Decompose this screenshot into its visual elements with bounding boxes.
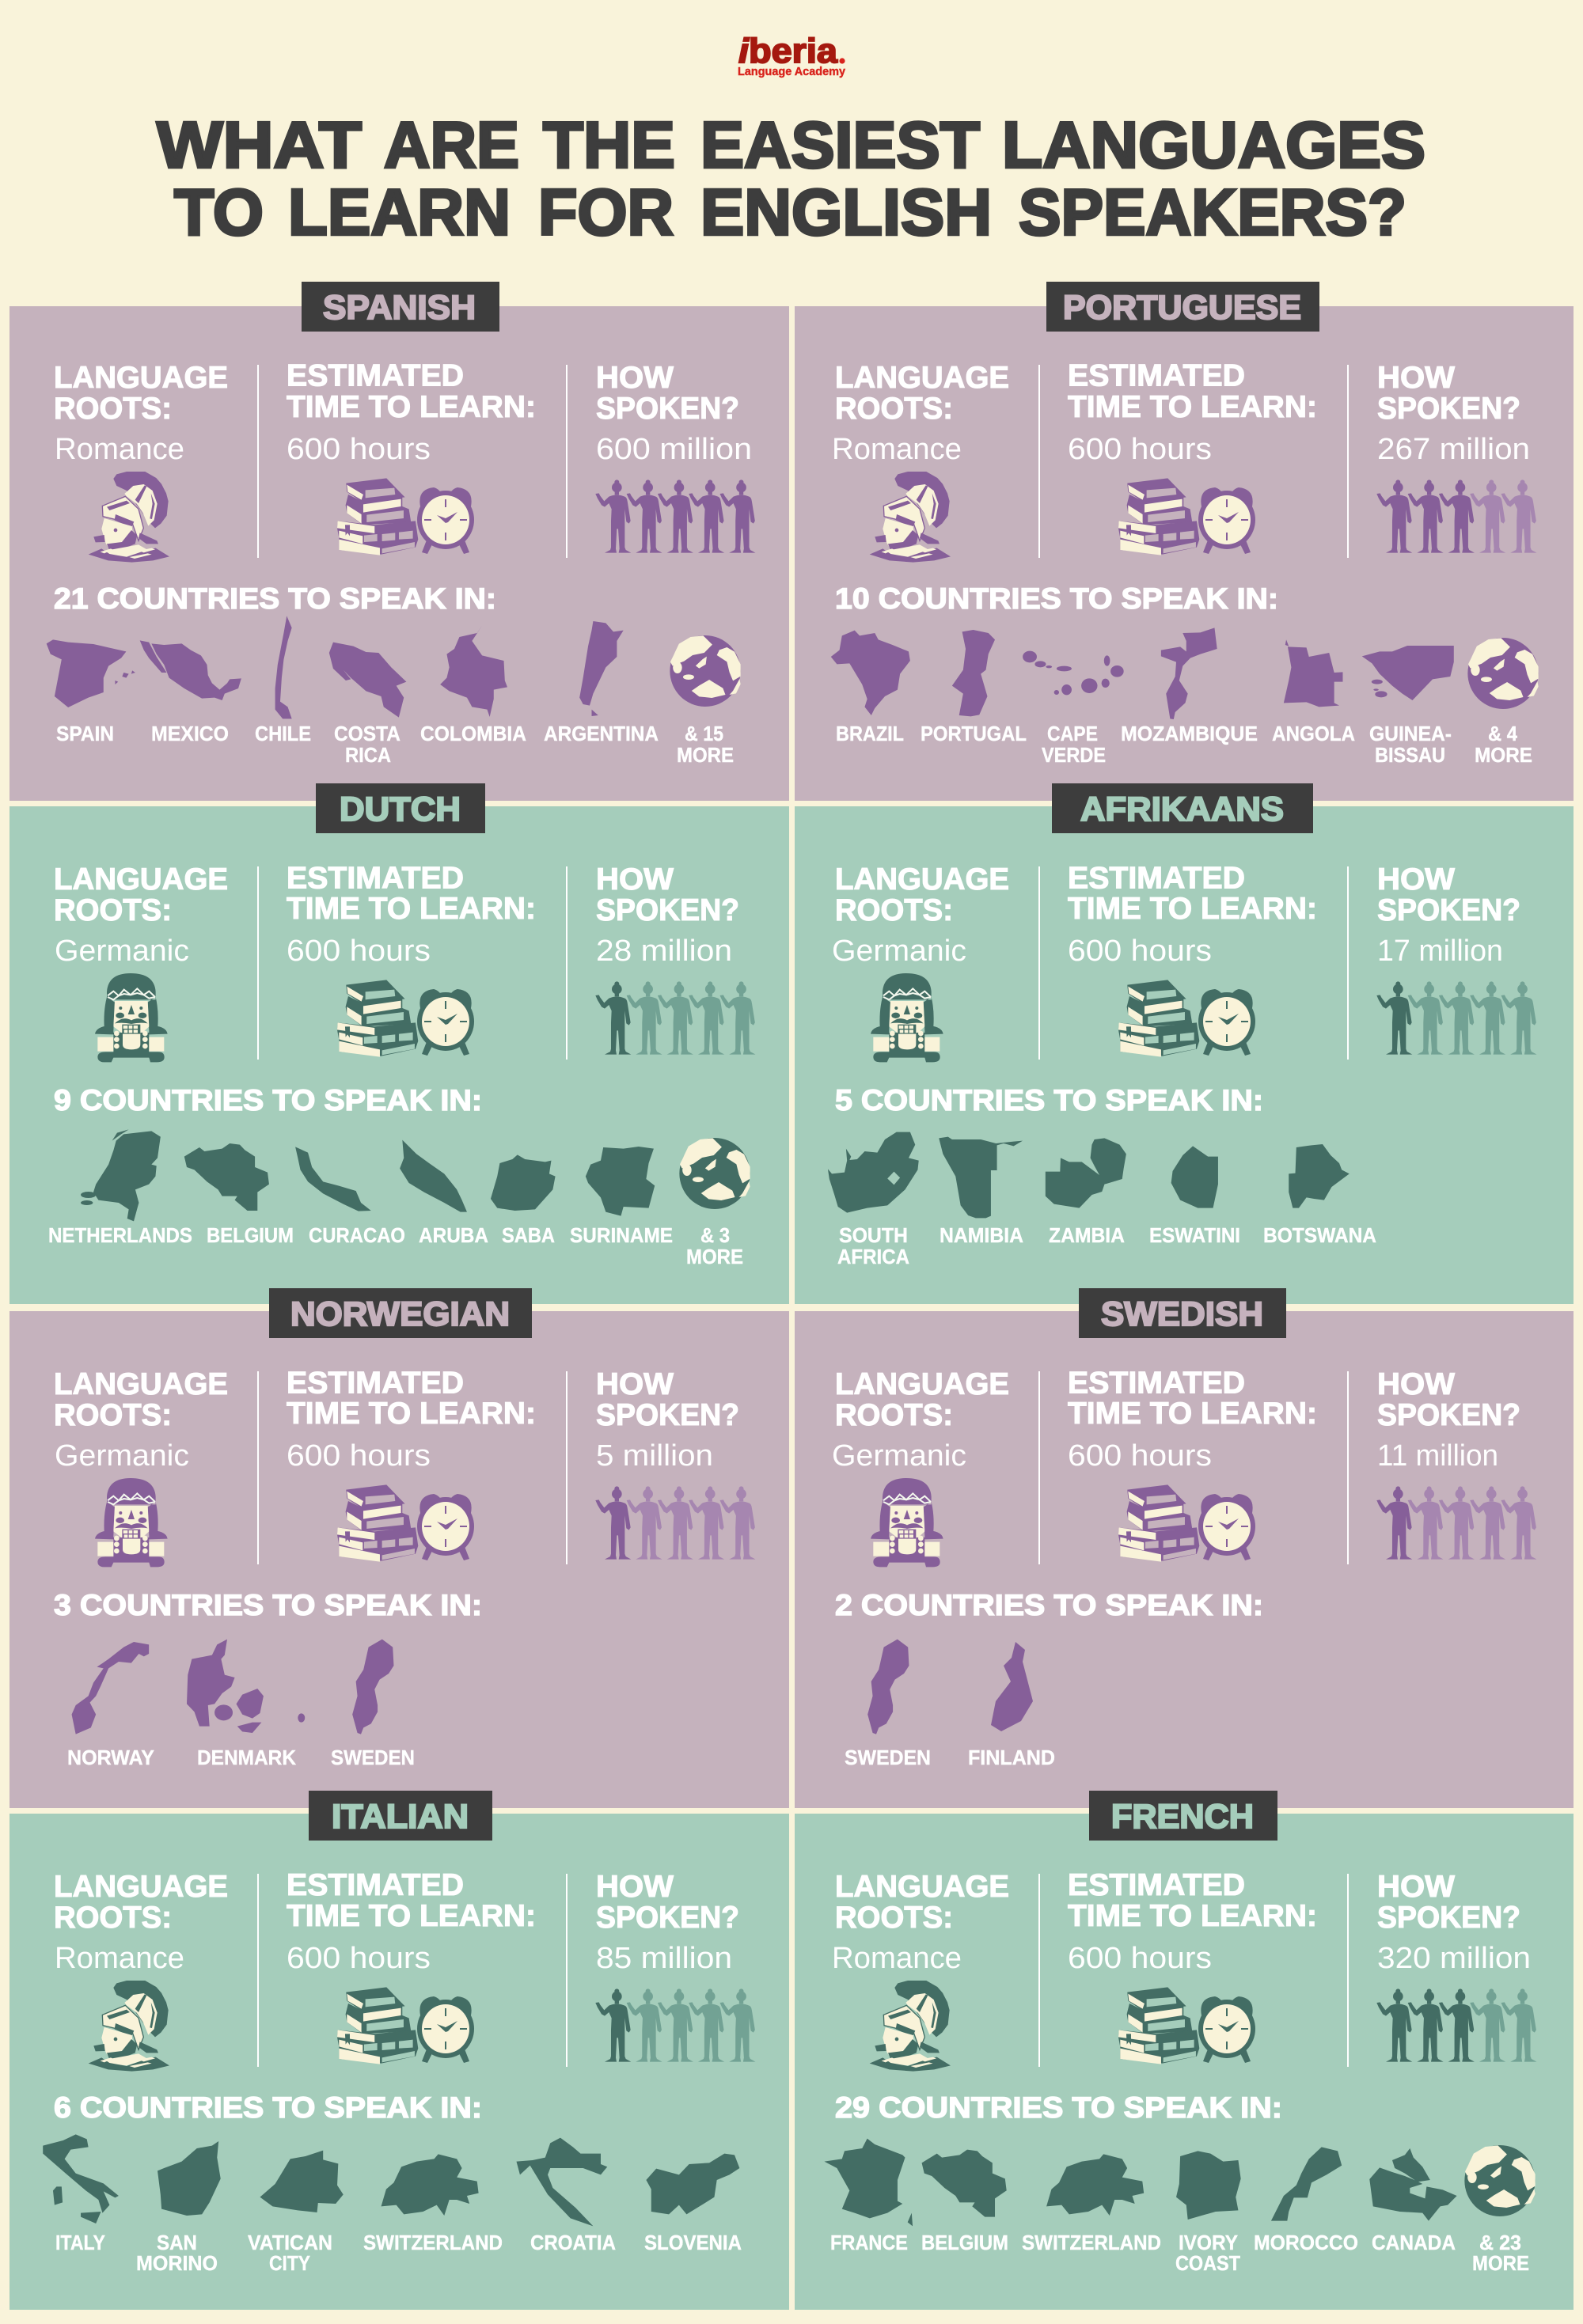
labels: Dutch countries: & 3: [700, 1223, 730, 1247]
stats row: Norwegian: 600 hours: [287, 1439, 431, 1473]
title: LANGUAGES: [1002, 108, 1425, 182]
stats row: Italian: 85 million: [596, 1942, 732, 1975]
labels: Swedish countries: [845, 1746, 1055, 1769]
panel: Dutch: [9, 783, 789, 1304]
labels: Portuguese countries: & 4: [1488, 722, 1517, 745]
labels: Dutch countries: SURINAME: [570, 1223, 673, 1247]
stats row: Spanish: Romance: [55, 433, 184, 466]
stats row: Swedish: ESTIMATED: [1068, 1366, 1245, 1401]
labels: Swedish countries: FINLAND: [968, 1746, 1055, 1769]
stats row: Spanish: ROOTS:: [54, 392, 172, 426]
stats row: French: Romance: [832, 1942, 962, 1975]
stats row: Italian: TIME TO LEARN:: [287, 1899, 536, 1933]
heading: countries: 2 COUNTRIES TO SPEAK IN:: [835, 1588, 1263, 1621]
stats row: Dutch: SPOKEN?: [596, 893, 739, 927]
labels: Dutch countries: ARUBA: [419, 1223, 488, 1247]
tab: Italian: ITALIAN: [332, 1798, 469, 1836]
heading: countries: 9 COUNTRIES TO SPEAK IN:: [54, 1083, 482, 1117]
stats row: Spanish: 600 hours: [287, 433, 431, 466]
labels: Norwegian countries: DENMARK: [197, 1746, 296, 1769]
stats row: Dutch: LANGUAGE: [54, 862, 228, 897]
icon: globe: [670, 635, 741, 707]
stats row: Spanish: 600 million: [596, 433, 752, 466]
stats row: Norwegian: HOW: [596, 1367, 674, 1401]
stats row: Afrikaans: 600 hours: [1068, 935, 1212, 968]
stats row: French: LANGUAGE: [835, 1870, 1009, 1904]
labels: Norwegian countries: [67, 1746, 415, 1769]
panel: French: [795, 1791, 1574, 2310]
labels: French countries: MORE: [1472, 2251, 1529, 2275]
stats row: Norwegian: TIME TO LEARN:: [287, 1397, 536, 1431]
logo: Iberia Language Academy: iberia: [738, 32, 838, 70]
labels: Norwegian countries: NORWAY: [67, 1746, 154, 1769]
labels: French countries: CANADA: [1372, 2231, 1456, 2254]
heading: countries: 5 COUNTRIES TO SPEAK IN:: [835, 1083, 1263, 1117]
stats row: Swedish: SPOKEN?: [1377, 1398, 1520, 1432]
stats row: Portuguese: [832, 359, 1537, 563]
panel: Italian: [9, 1791, 789, 2310]
labels: Spanish countries: ARGENTINA: [544, 722, 659, 745]
labels: Afrikaans countries: NAMIBIA: [940, 1223, 1023, 1247]
maps: Italian countries: [43, 2134, 739, 2226]
labels: Afrikaans countries: ESWATINI: [1149, 1223, 1240, 1247]
labels: Dutch countries: SABA: [502, 1223, 555, 1247]
stats row: Portuguese: TIME TO LEARN:: [1068, 390, 1317, 424]
stats row: Swedish: ROOTS:: [835, 1398, 953, 1432]
labels: Dutch countries: BELGIUM: [207, 1223, 294, 1247]
maps: Dutch countries: [81, 1129, 655, 1221]
stats row: Afrikaans: TIME TO LEARN:: [1068, 892, 1317, 926]
labels: Spanish countries: & 15: [685, 722, 723, 745]
stats row: Spanish: TIME TO LEARN:: [287, 390, 536, 424]
stats row: Portuguese: 600 hours: [1068, 433, 1212, 466]
stats row: Spanish: HOW: [596, 361, 674, 395]
stats row: Dutch: ROOTS:: [54, 893, 172, 927]
stats row: Portuguese: 267 million: [1377, 433, 1530, 466]
stats row: Afrikaans: 17 million: [1377, 935, 1503, 968]
maps: Afrikaans countries: [828, 1132, 1350, 1218]
labels: Italian countries: CITY: [269, 2251, 310, 2275]
stats row: Afrikaans: SPOKEN?: [1377, 893, 1520, 927]
labels: French countries: [830, 2231, 1529, 2275]
stats row: French: HOW: [1377, 1870, 1456, 1904]
stats row: Dutch: HOW: [596, 862, 674, 897]
title: ENGLISH: [700, 176, 992, 248]
title: THE: [543, 108, 675, 182]
logo: Iberia Language Academy: Language Academy: [738, 66, 845, 78]
tab: Norwegian: NORWEGIAN: [290, 1295, 510, 1333]
labels: French countries: COAST: [1175, 2251, 1240, 2275]
stats row: Italian: HOW: [596, 1870, 674, 1904]
labels: Spanish countries: SPAIN: [56, 722, 114, 745]
labels: Portuguese countries: BRAZIL: [836, 722, 904, 745]
labels: Portuguese countries: MOZAMBIQUE: [1121, 722, 1258, 745]
title: SPEAKERS?: [1019, 176, 1406, 248]
labels: Afrikaans countries: ZAMBIA: [1049, 1223, 1125, 1247]
stats row: Dutch: 600 hours: [287, 935, 431, 968]
labels: Portuguese countries: [836, 722, 1532, 767]
tab: French: FRENCH: [1111, 1798, 1254, 1836]
stats row: Spanish: SPOKEN?: [596, 392, 739, 426]
stats row: Italian: ESTIMATED: [287, 1868, 464, 1902]
stats row: Portuguese: LANGUAGE: [835, 361, 1009, 395]
tab: Spanish: SPANISH: [323, 289, 476, 327]
stats row: Swedish: 600 hours: [1068, 1439, 1212, 1473]
labels: French countries: BELGIUM: [921, 2231, 1008, 2254]
labels: Italian countries: [55, 2231, 742, 2275]
icon: globe: [679, 1138, 750, 1209]
heading: countries: 6 COUNTRIES TO SPEAK IN:: [54, 2091, 482, 2124]
panel: Afrikaans: [795, 783, 1574, 1304]
labels: Dutch countries: NETHERLANDS: [48, 1223, 192, 1247]
labels: Portuguese countries: BISSAU: [1375, 743, 1445, 767]
stats row: Afrikaans: HOW: [1377, 862, 1456, 897]
labels: Italian countries: ITALY: [55, 2231, 105, 2254]
labels: Portuguese countries: PORTUGAL: [921, 722, 1027, 745]
labels: French countries: SWITZERLAND: [1022, 2231, 1161, 2254]
heading: countries: 3 COUNTRIES TO SPEAK IN:: [54, 1588, 482, 1621]
labels: Spanish countries: COSTA: [334, 722, 400, 745]
title: LEARN: [288, 176, 511, 248]
stats row: Italian: SPOKEN?: [596, 1901, 739, 1935]
icon: globe: [1464, 2145, 1536, 2216]
stats row: Norwegian: 5 million: [596, 1439, 713, 1473]
labels: French countries: & 23: [1479, 2231, 1521, 2254]
labels: Portuguese countries: GUINEA-: [1369, 722, 1452, 745]
labels: Italian countries: SWITZERLAND: [363, 2231, 503, 2254]
stats row: Italian: 600 hours: [287, 1942, 431, 1975]
tab: Afrikaans: AFRIKAANS: [1080, 790, 1284, 828]
stats row: Portuguese: ESTIMATED: [1068, 359, 1245, 392]
stats row: Norwegian: ESTIMATED: [287, 1366, 464, 1401]
panel: Swedish: [795, 1288, 1574, 1808]
stats row: Italian: [54, 1868, 756, 2072]
labels: Afrikaans countries: SOUTH: [839, 1223, 908, 1247]
stats row: Norwegian: SPOKEN?: [596, 1398, 739, 1432]
tab: Swedish: SWEDISH: [1101, 1295, 1263, 1333]
stats row: Portuguese: Romance: [832, 433, 962, 466]
stats row: Portuguese: SPOKEN?: [1377, 392, 1520, 426]
heading: countries: 29 COUNTRIES TO SPEAK IN:: [835, 2091, 1282, 2124]
stats row: Spanish: ESTIMATED: [287, 359, 464, 392]
labels: Portuguese countries: MORE: [1475, 743, 1532, 767]
maps: Norwegian countries: [72, 1640, 393, 1734]
labels: Spanish countries: RICA: [345, 743, 391, 767]
labels: Dutch countries: MORE: [686, 1245, 743, 1268]
stats row: Norwegian: LANGUAGE: [54, 1367, 228, 1401]
stats row: Swedish: 11 million: [1377, 1439, 1498, 1473]
maps: Portuguese countries: [831, 627, 1454, 719]
tab: Italian: [309, 1791, 492, 1841]
stats row: Dutch: ESTIMATED: [287, 861, 464, 896]
labels: Afrikaans countries: AFRICA: [837, 1245, 909, 1268]
tab: Portuguese: [1046, 282, 1319, 332]
stats row: Afrikaans: [832, 861, 1537, 1062]
stats row: Dutch: Germanic: [55, 935, 189, 968]
title: TO: [174, 176, 264, 248]
stats row: French: ROOTS:: [835, 1901, 953, 1935]
labels: Dutch countries: [48, 1223, 743, 1268]
tab: Swedish: [1079, 1288, 1286, 1338]
maps: Spanish countries: [47, 616, 624, 718]
stats row: Afrikaans: LANGUAGE: [835, 862, 1009, 897]
stats row: Norwegian: [54, 1366, 756, 1567]
labels: French countries: MOROCCO: [1254, 2231, 1358, 2254]
labels: Portuguese countries: ANGOLA: [1272, 722, 1355, 745]
labels: Spanish countries: MEXICO: [151, 722, 229, 745]
labels: Italian countries: MORINO: [136, 2251, 218, 2275]
tab: Afrikaans: [1052, 783, 1313, 833]
stats row: French: TIME TO LEARN:: [1068, 1899, 1317, 1933]
labels: Spanish countries: COLOMBIA: [420, 722, 526, 745]
stats row: Afrikaans: Germanic: [832, 935, 966, 968]
stats row: Dutch: TIME TO LEARN:: [287, 892, 536, 926]
panel: Portuguese: [795, 282, 1574, 801]
labels: Portuguese countries: CAPE: [1047, 722, 1098, 745]
labels: Spanish countries: CHILE: [255, 722, 311, 745]
tab: Portuguese: PORTUGUESE: [1063, 289, 1301, 327]
maps: Swedish countries: [867, 1640, 1033, 1734]
stats row: French: SPOKEN?: [1377, 1901, 1520, 1935]
stats row: French: [832, 1868, 1537, 2072]
stats row: Portuguese: HOW: [1377, 361, 1456, 395]
title: EASIEST: [700, 108, 980, 182]
stats row: Swedish: TIME TO LEARN:: [1068, 1397, 1317, 1431]
stats row: Norwegian: ROOTS:: [54, 1398, 172, 1432]
stats row: French: 600 hours: [1068, 1942, 1212, 1975]
tab: Spanish: [302, 282, 499, 332]
stats row: Spanish: LANGUAGE: [54, 361, 228, 395]
labels: Swedish countries: SWEDEN: [845, 1746, 931, 1769]
labels: Portuguese countries: VERDE: [1042, 743, 1106, 767]
title: ARE: [384, 108, 519, 182]
stats row: Swedish: HOW: [1377, 1367, 1456, 1401]
labels: Italian countries: CROATIA: [530, 2231, 616, 2254]
labels: Spanish countries: MORE: [677, 743, 734, 767]
title: FOR: [538, 176, 674, 248]
tab: Dutch: [316, 783, 485, 833]
stats row: Norwegian: Germanic: [55, 1439, 189, 1473]
stats row: Portuguese: ROOTS:: [835, 392, 953, 426]
stats row: Swedish: [832, 1366, 1537, 1567]
stats row: Spanish: [54, 359, 756, 563]
labels: Afrikaans countries: [837, 1223, 1376, 1268]
labels: French countries: FRANCE: [830, 2231, 908, 2254]
labels: Norwegian countries: SWEDEN: [331, 1746, 415, 1769]
stats row: Dutch: 28 million: [596, 935, 732, 968]
panel: Norwegian: [9, 1288, 789, 1808]
stats row: French: 320 million: [1377, 1942, 1531, 1975]
stats row: Afrikaans: ESTIMATED: [1068, 861, 1245, 896]
labels: French countries: IVORY: [1179, 2231, 1238, 2254]
panel: Spanish: [9, 282, 789, 801]
stats row: Dutch: [54, 861, 756, 1062]
tab: French: [1089, 1791, 1277, 1841]
labels: Italian countries: VATICAN: [248, 2231, 332, 2254]
labels: Dutch countries: CURACAO: [309, 1223, 405, 1247]
title: [157, 108, 1425, 248]
stats row: Italian: Romance: [55, 1942, 184, 1975]
tab: Norwegian: [269, 1288, 532, 1338]
stats row: Swedish: LANGUAGE: [835, 1367, 1009, 1401]
labels: Afrikaans countries: BOTSWANA: [1263, 1223, 1376, 1247]
stats row: Afrikaans: ROOTS:: [835, 893, 953, 927]
labels: Spanish countries: [56, 722, 734, 767]
stats row: French: ESTIMATED: [1068, 1868, 1245, 1902]
icon: globe: [1467, 638, 1539, 709]
stats row: Italian: LANGUAGE: [54, 1870, 228, 1904]
stats row: Italian: ROOTS:: [54, 1901, 172, 1935]
tab: Dutch: DUTCH: [340, 790, 461, 828]
labels: Italian countries: SLOVENIA: [644, 2231, 742, 2254]
heading: countries: 10 COUNTRIES TO SPEAK IN:: [835, 582, 1278, 615]
stats row: Swedish: Germanic: [832, 1439, 966, 1473]
heading: countries: 21 COUNTRIES TO SPEAK IN:: [54, 582, 496, 615]
maps: French countries: [824, 2139, 1457, 2226]
labels: Italian countries: SAN: [157, 2231, 197, 2254]
title: WHAT: [157, 108, 362, 182]
